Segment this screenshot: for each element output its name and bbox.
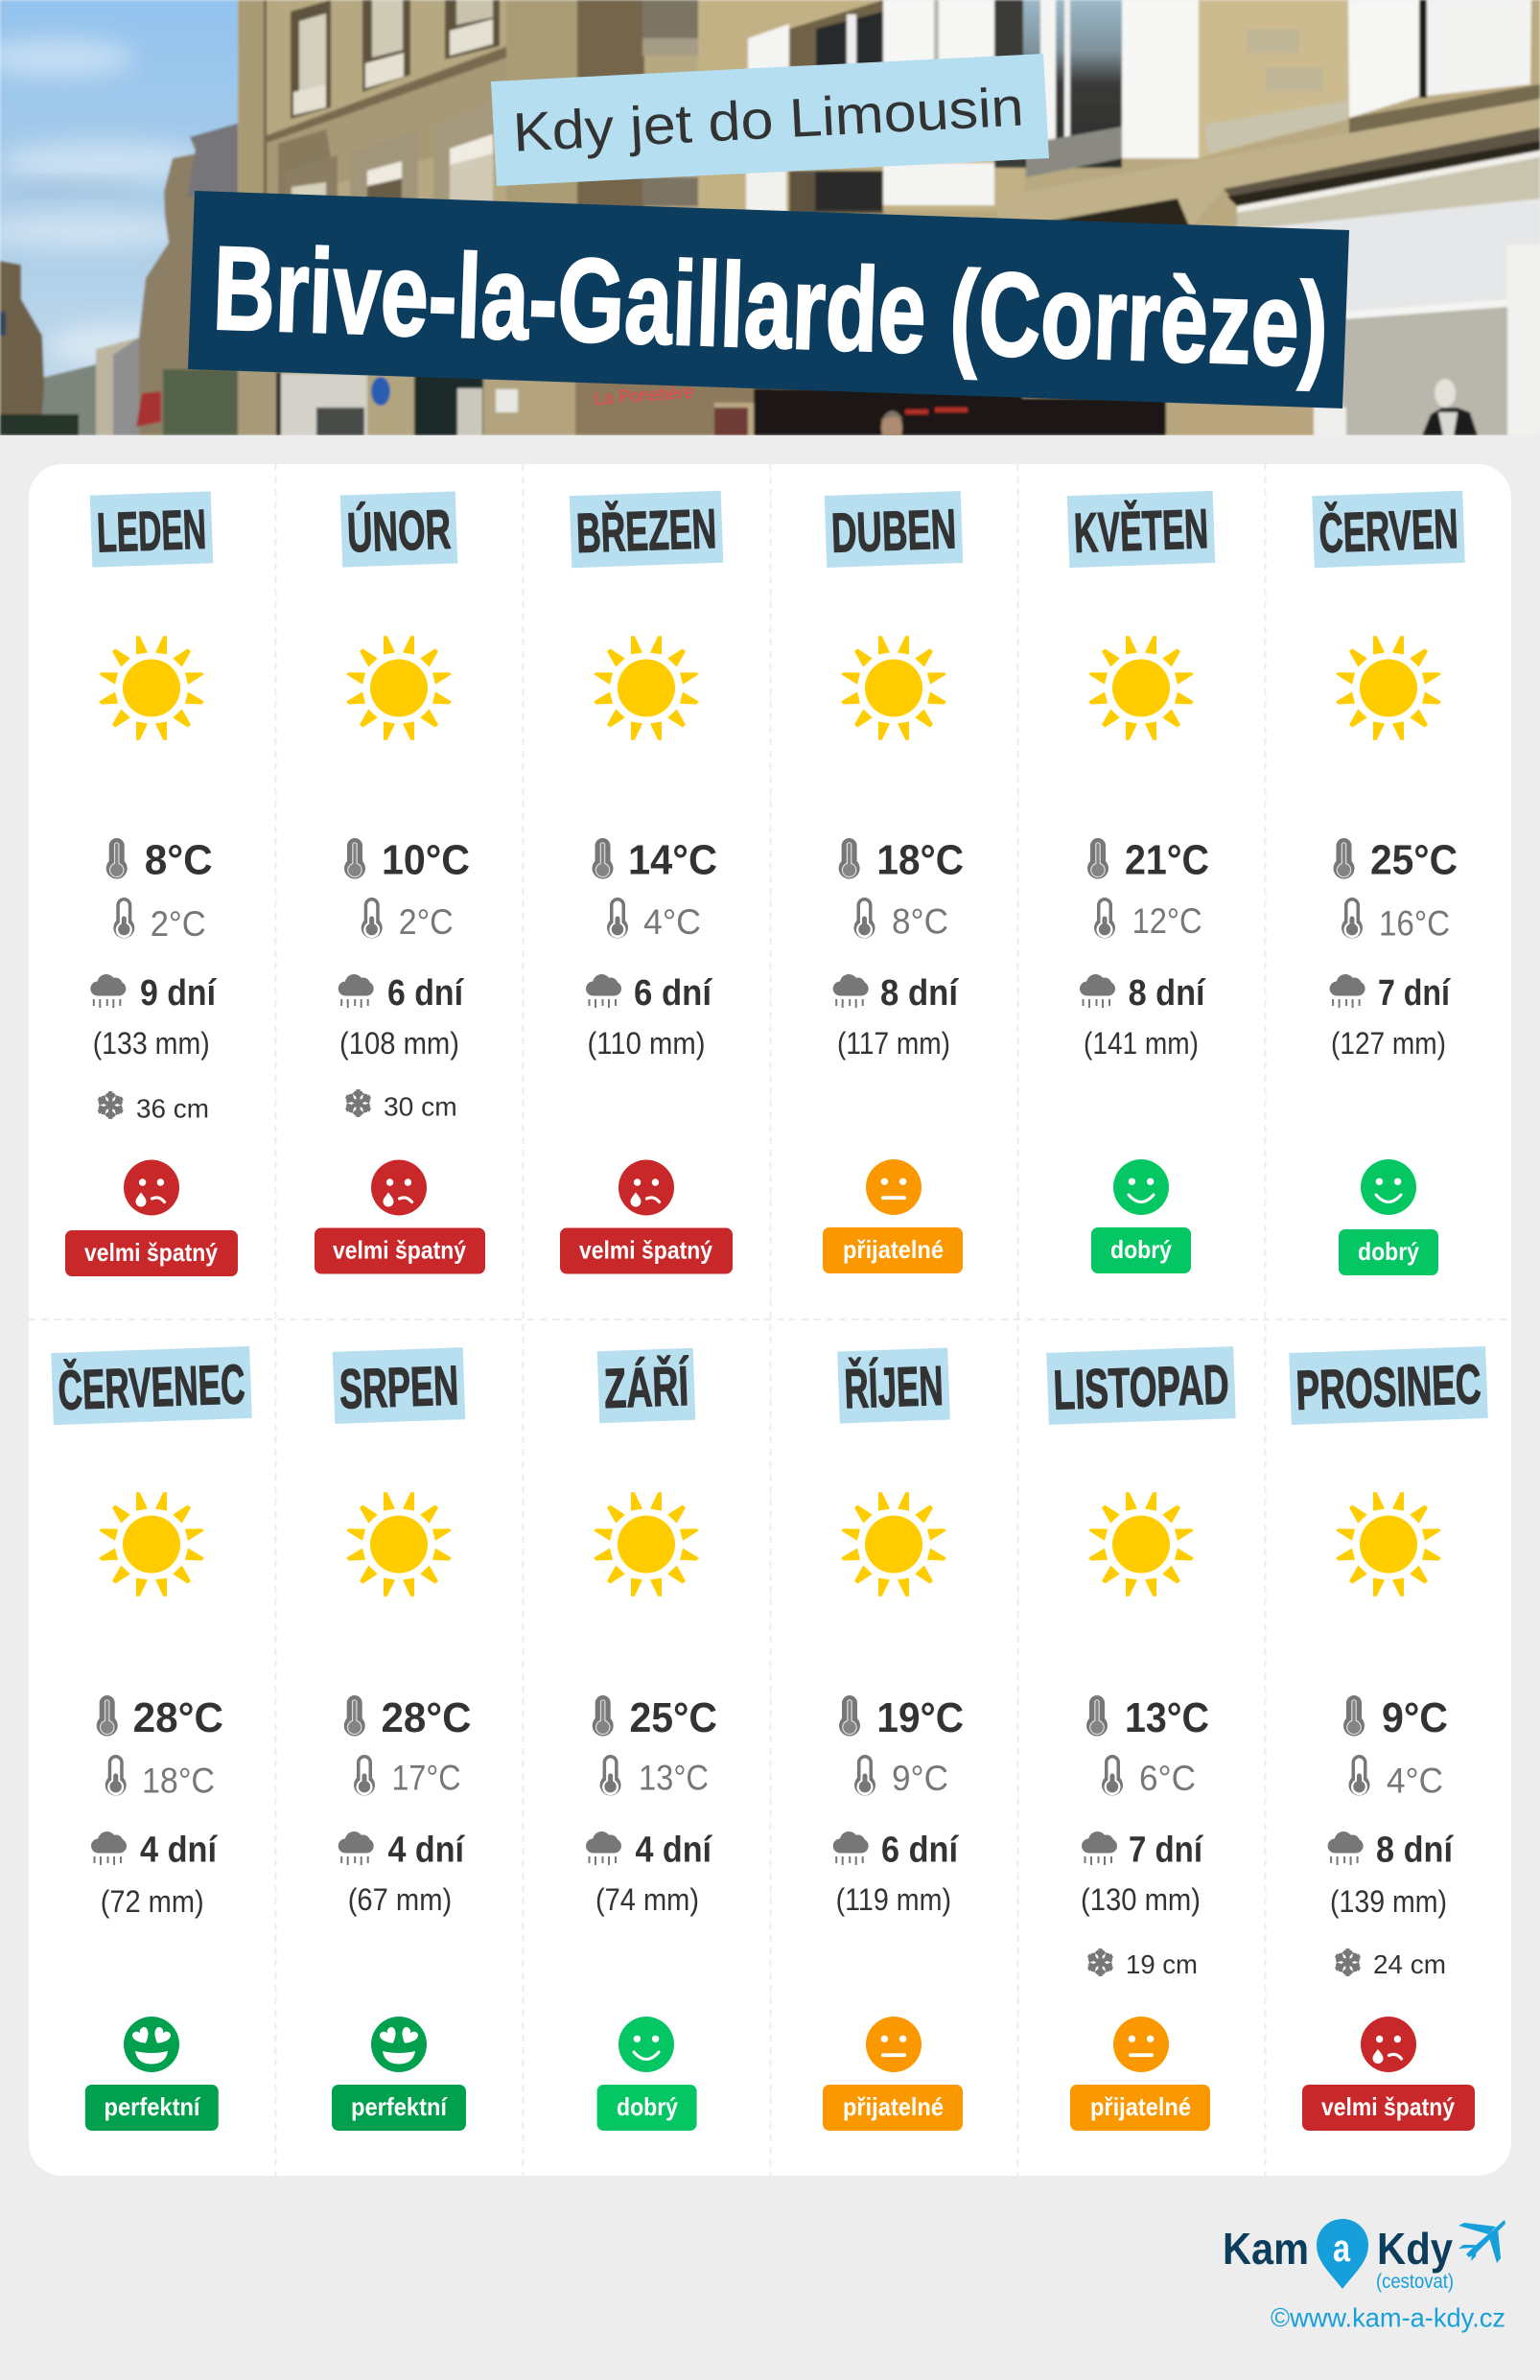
month heading	[90, 491, 213, 568]
icon: sun	[1336, 636, 1441, 740]
icon: sun	[841, 636, 946, 740]
high temperature	[344, 1694, 472, 1741]
month heading: SRPEN	[338, 1354, 459, 1421]
low temperature: 4°C	[1387, 1761, 1443, 1800]
rainy days: 4 dní	[140, 1831, 218, 1871]
low temperature	[113, 898, 206, 944]
rainy days	[1080, 973, 1206, 1014]
rating badge: přijatelné	[843, 2092, 944, 2121]
rainy days: 9 dní	[140, 973, 217, 1014]
rating badge	[315, 1227, 485, 1273]
rainy days	[90, 973, 217, 1014]
rating badge: perfektní	[351, 2092, 448, 2121]
snowfall: 36 cm	[136, 1093, 209, 1124]
subtitle banner: Kdy jet do Limousin	[511, 77, 1025, 164]
icon: sun	[594, 636, 699, 740]
low temperature	[600, 1755, 709, 1798]
rainfall: (67 mm)	[348, 1882, 452, 1917]
panel: BŘEZEN	[560, 491, 733, 1274]
icon: neutral face	[866, 2017, 922, 2072]
month heading: BŘEZEN	[575, 498, 717, 565]
rainy days	[833, 1831, 959, 1871]
month heading: ZÁŘÍ	[603, 1355, 690, 1420]
high temperature	[1333, 837, 1458, 884]
month heading: LEDEN	[96, 499, 207, 564]
snowfall	[1334, 1948, 1446, 1979]
rating badge: přijatelné	[843, 1235, 944, 1264]
high temperature	[106, 837, 213, 884]
snowfall	[344, 1089, 457, 1122]
rating badge	[85, 2085, 219, 2131]
rating badge	[560, 1227, 733, 1273]
low temperature: 8°C	[892, 901, 948, 941]
low temperature	[854, 1755, 948, 1798]
icon: crying face	[124, 1160, 179, 1216]
high temperature	[97, 1694, 223, 1741]
rainy days: 8 dní	[880, 973, 959, 1014]
rainy days: 7 dní	[1378, 973, 1451, 1014]
low temperature: 17°C	[391, 1759, 460, 1798]
icon: neutral face	[866, 1159, 922, 1215]
high temperature: 14°C	[628, 837, 717, 884]
low temperature	[362, 898, 454, 942]
rating badge: dobrý	[1110, 1235, 1172, 1264]
high temperature: 21°C	[1125, 837, 1209, 884]
low temperature: 2°C	[151, 904, 206, 944]
month heading	[51, 1346, 252, 1425]
shop sign text: La Ponetière	[594, 383, 694, 409]
icon: sun	[346, 636, 452, 740]
high temperature	[593, 1694, 717, 1741]
icon: happy face	[1113, 1159, 1169, 1215]
icon: sun	[594, 1492, 699, 1597]
rainy days: 7 dní	[1129, 1831, 1203, 1871]
rainfall: (74 mm)	[595, 1882, 699, 1917]
high temperature: 25°C	[629, 1694, 717, 1741]
icon: airplane	[1458, 2220, 1505, 2263]
rainy days: 8 dní	[1129, 973, 1206, 1014]
rating badge	[1091, 1227, 1191, 1273]
rating badge	[332, 2085, 466, 2131]
rating badge: dobrý	[1358, 1237, 1419, 1266]
rainy days	[338, 1831, 465, 1871]
month heading	[1312, 491, 1465, 568]
hero photo: street in Brive-la-Gaillarde	[0, 0, 1540, 443]
high temperature	[839, 837, 964, 884]
icon: heart-eyes face	[124, 2017, 179, 2072]
rainfall: (117 mm)	[837, 1026, 950, 1061]
rainy days	[91, 1831, 218, 1871]
rainy days	[1330, 973, 1451, 1014]
month heading	[597, 1348, 695, 1423]
rainy days: 6 dní	[881, 1831, 959, 1871]
rainfall: (139 mm)	[1330, 1884, 1447, 1919]
low temperature	[1342, 898, 1450, 943]
icon: sun	[99, 636, 204, 740]
rating badge: přijatelné	[1090, 2092, 1191, 2121]
rating badge	[1070, 2085, 1210, 2131]
rainy days	[586, 1831, 712, 1871]
panel: LISTOPAD	[1046, 1346, 1236, 2131]
high temperature	[839, 1694, 964, 1741]
month heading	[340, 491, 457, 568]
panel: KVĚTEN	[1067, 491, 1215, 1273]
panel: PROSINEC	[1289, 1346, 1488, 2131]
rainy days	[586, 973, 712, 1014]
high temperature: 25°C	[1370, 837, 1458, 884]
panel: ÚNOR	[315, 491, 485, 1273]
icon: sun	[346, 1492, 452, 1597]
month heading	[333, 1347, 465, 1424]
panel: ČERVENEC	[51, 1346, 252, 2131]
low temperature	[354, 1755, 460, 1798]
icon: heart-eyes face	[371, 2017, 427, 2072]
month heading	[1046, 1346, 1236, 1425]
month heading: LISTOPAD	[1052, 1353, 1230, 1422]
logo: Kam a Kdy: a	[1333, 2228, 1351, 2270]
low temperature: 9°C	[892, 1759, 948, 1798]
icon: sun	[1336, 1492, 1441, 1597]
icon: neutral face	[1113, 2017, 1169, 2072]
low temperature	[1348, 1755, 1443, 1800]
low temperature	[607, 898, 701, 942]
rating badge	[823, 1227, 963, 1273]
high temperature: 19°C	[876, 1694, 964, 1741]
low temperature	[1102, 1755, 1196, 1798]
rainy days	[833, 973, 959, 1014]
low temperature	[1094, 898, 1202, 941]
rating badge	[1339, 1229, 1438, 1275]
white calendar panel	[29, 464, 1511, 2176]
logo: Kam a Kdy: Kam	[1223, 2224, 1309, 2274]
rainfall: (108 mm)	[339, 1026, 459, 1061]
rainfall: (119 mm)	[836, 1882, 951, 1917]
rainy days: 4 dní	[635, 1831, 712, 1871]
panel: ZÁŘÍ	[586, 1348, 717, 2131]
snowfall: 30 cm	[384, 1091, 457, 1122]
high temperature: 13°C	[1125, 1694, 1209, 1741]
month heading: KVĚTEN	[1073, 498, 1209, 565]
panel: DUBEN	[823, 491, 964, 1273]
subtitle banner	[491, 54, 1049, 186]
high temperature: 28°C	[382, 1694, 472, 1741]
rainfall: (72 mm)	[101, 1884, 204, 1919]
high temperature: 9°C	[1382, 1694, 1448, 1741]
website credit: ©www.kam-a-kdy.cz	[1271, 2303, 1505, 2333]
month heading: ÚNOR	[346, 499, 452, 564]
low temperature: 6°C	[1139, 1759, 1196, 1798]
rainfall: (141 mm)	[1084, 1026, 1199, 1061]
high temperature: 28°C	[133, 1694, 223, 1741]
rainy days: 6 dní	[634, 973, 712, 1014]
rainy days: 8 dní	[1376, 1831, 1454, 1871]
rainfall: (127 mm)	[1331, 1026, 1446, 1061]
high temperature: 8°C	[145, 837, 213, 884]
panel: ŘÍJEN	[823, 1348, 964, 2131]
icon: sun	[99, 1492, 204, 1597]
high temperature	[1343, 1694, 1448, 1741]
month heading	[1067, 491, 1215, 568]
icon: happy face	[618, 2017, 674, 2072]
logo: Kam a Kdy: (cestovat)	[1376, 2271, 1454, 2293]
month heading: ŘÍJEN	[843, 1355, 945, 1420]
rainfall: (110 mm)	[587, 1026, 706, 1061]
high temperature	[1087, 837, 1209, 884]
rating badge	[823, 2085, 963, 2131]
rating badge: dobrý	[617, 2092, 678, 2121]
snowfall	[96, 1091, 209, 1124]
rainy days: 4 dní	[387, 1831, 465, 1871]
icon: sun	[841, 1492, 946, 1597]
snowfall: 19 cm	[1126, 1949, 1198, 1979]
icon: happy face	[1361, 1159, 1416, 1215]
high temperature: 10°C	[382, 837, 470, 884]
icon: crying face	[1361, 2017, 1416, 2072]
rating badge: perfektní	[104, 2092, 200, 2121]
rating badge: velmi špatný	[1321, 2092, 1455, 2121]
month heading	[825, 491, 963, 568]
rainy days	[338, 973, 464, 1014]
icon: sun	[1088, 636, 1194, 740]
low temperature: 2°C	[399, 902, 454, 942]
rainy days	[1328, 1831, 1454, 1871]
rating badge	[1302, 2085, 1475, 2131]
month heading	[570, 491, 723, 568]
rating badge	[65, 1230, 238, 1276]
rating badge: velmi špatný	[84, 1238, 218, 1267]
rainfall: (130 mm)	[1081, 1882, 1201, 1917]
rainy days	[1082, 1831, 1203, 1871]
month heading: ČERVENEC	[57, 1353, 246, 1422]
rating badge: velmi špatný	[579, 1235, 712, 1264]
high temperature	[344, 837, 470, 884]
icon: map pin	[1317, 2219, 1368, 2289]
rating badge	[597, 2085, 697, 2131]
rainy days: 6 dní	[387, 973, 464, 1014]
panel: SRPEN	[332, 1347, 472, 2131]
high temperature: 18°C	[876, 837, 964, 884]
panel: ČERVEN	[1312, 491, 1465, 1275]
low temperature: 16°C	[1379, 903, 1450, 943]
month heading: DUBEN	[830, 498, 957, 565]
logo: Kam a Kdy: Kdy	[1377, 2224, 1453, 2274]
icon: crying face	[618, 1160, 674, 1216]
low temperature: 13°C	[639, 1759, 709, 1798]
high temperature	[593, 837, 717, 884]
snowfall	[1086, 1948, 1198, 1979]
month heading	[837, 1348, 950, 1423]
logo: Kam a Kdy	[1223, 2219, 1505, 2293]
low temperature: 4°C	[643, 902, 701, 942]
rainfall: (133 mm)	[93, 1026, 210, 1061]
low temperature: 18°C	[142, 1761, 215, 1800]
icon: sun	[1088, 1492, 1194, 1597]
low temperature	[105, 1755, 215, 1800]
icon: crying face	[371, 1160, 427, 1216]
high temperature	[1086, 1694, 1209, 1741]
rating badge: velmi špatný	[333, 1235, 466, 1264]
snowfall: 24 cm	[1373, 1949, 1446, 1979]
low temperature: 12°C	[1132, 901, 1202, 941]
low temperature	[853, 898, 948, 941]
panel: LEDEN	[65, 491, 238, 1276]
